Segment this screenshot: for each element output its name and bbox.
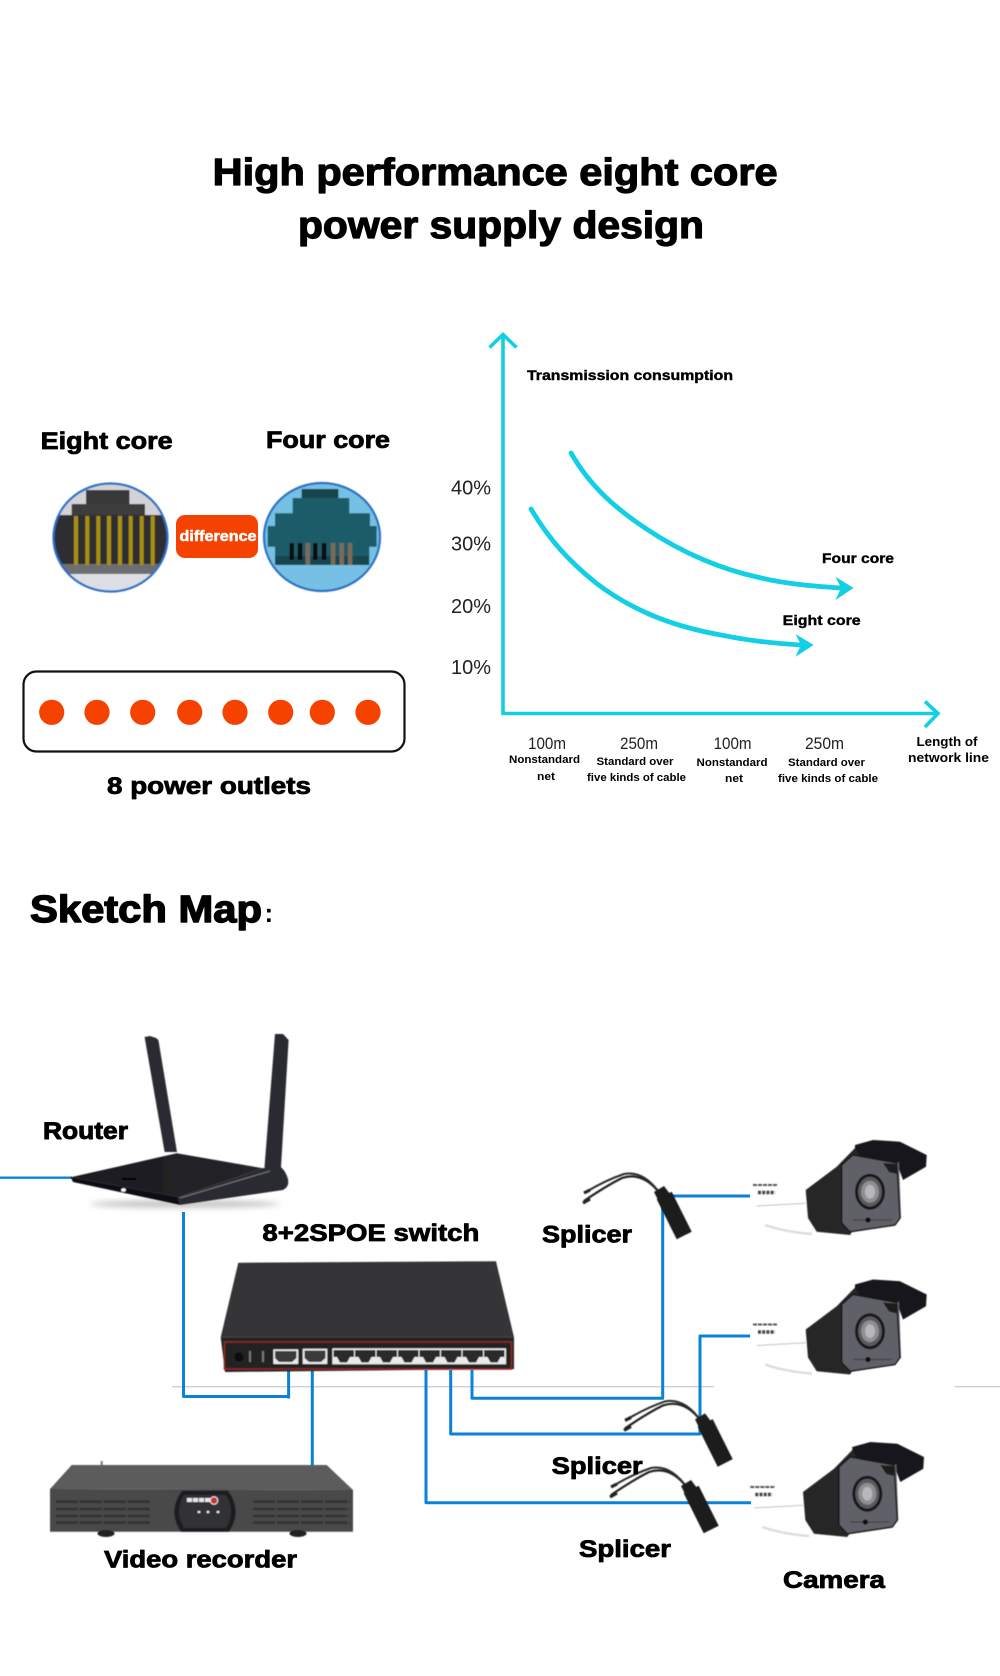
title <box>213 152 778 247</box>
y axis percent labels: 20% <box>451 596 491 618</box>
x axis labels: Standard over <box>788 757 866 769</box>
x axis labels: 250m <box>620 734 658 753</box>
x axis labels: Length of <box>916 734 978 749</box>
x axis labels: five kinds of cable <box>778 773 878 785</box>
cables <box>0 1178 751 1503</box>
label: splicer 3: Splicer <box>579 1536 671 1563</box>
panel: network diagram <box>0 1034 1000 1594</box>
icon: splicer 3 <box>610 1467 719 1533</box>
curve: eight core <box>531 509 814 657</box>
icon: camera 2 <box>753 1280 927 1374</box>
icon: eight core RJ45 socket <box>50 480 172 595</box>
curve: four core <box>571 453 854 600</box>
label: splicer 1: Splicer <box>542 1222 632 1248</box>
icon: splicer 2 <box>624 1401 733 1467</box>
icon: splicer 1 <box>583 1173 692 1239</box>
axes <box>490 334 938 727</box>
x axis labels <box>509 734 989 785</box>
x axis labels: network line <box>908 750 989 765</box>
x axis labels: 100m <box>714 734 752 753</box>
callout: difference <box>176 515 258 558</box>
title: High performance eight core <box>213 152 778 194</box>
y axis title: Transmission consumption <box>527 367 733 383</box>
heading: four core: Four core <box>266 427 390 454</box>
x axis labels: five kinds of cable <box>587 772 686 784</box>
icon: four core RJ45 socket <box>262 480 382 595</box>
heading: sketch map: Sketch Map <box>30 889 262 931</box>
background gray rules <box>172 1386 1000 1388</box>
icon: video recorder <box>50 1461 353 1537</box>
label: eight core: Eight core <box>783 612 861 628</box>
icon: 8+2SPOE switch <box>221 1261 514 1372</box>
icon: camera 3 <box>750 1442 924 1537</box>
panel: 8 power outlets <box>24 672 404 752</box>
icon: router <box>71 1034 289 1208</box>
y axis percent labels: 30% <box>451 534 491 556</box>
x axis labels: net <box>537 771 555 783</box>
chart: transmission consumption vs cable length <box>451 334 989 785</box>
x axis labels: Nonstandard <box>696 757 768 769</box>
panel: eight core vs four core comparison <box>24 427 404 800</box>
y axis percent labels: 40% <box>451 478 491 500</box>
label: switch: 8+2SPOE switch <box>262 1220 479 1247</box>
heading: eight core: Eight core <box>41 428 173 455</box>
label: video recorder: Video recorder <box>104 1546 297 1574</box>
icon: camera 1 <box>753 1140 927 1235</box>
caption: 8 power outlets: 8 power outlets <box>107 773 311 800</box>
x axis labels: 100m <box>528 734 566 753</box>
x axis labels: net <box>725 773 743 785</box>
x axis labels: Nonstandard <box>509 754 580 766</box>
callout: difference: difference <box>180 529 256 545</box>
x axis labels: 250m <box>805 734 844 753</box>
label: camera: Camera <box>783 1567 886 1594</box>
outlet dots <box>39 700 381 725</box>
label: router: Router <box>43 1118 128 1145</box>
y axis percent labels: 10% <box>451 657 491 679</box>
label: splicer 2: Splicer <box>552 1453 643 1480</box>
y axis percent labels <box>451 478 491 679</box>
heading: sketch map: : <box>264 898 273 928</box>
x axis labels: Standard over <box>596 756 674 768</box>
title: power supply design <box>298 205 704 247</box>
label: four core: Four core <box>822 550 894 566</box>
